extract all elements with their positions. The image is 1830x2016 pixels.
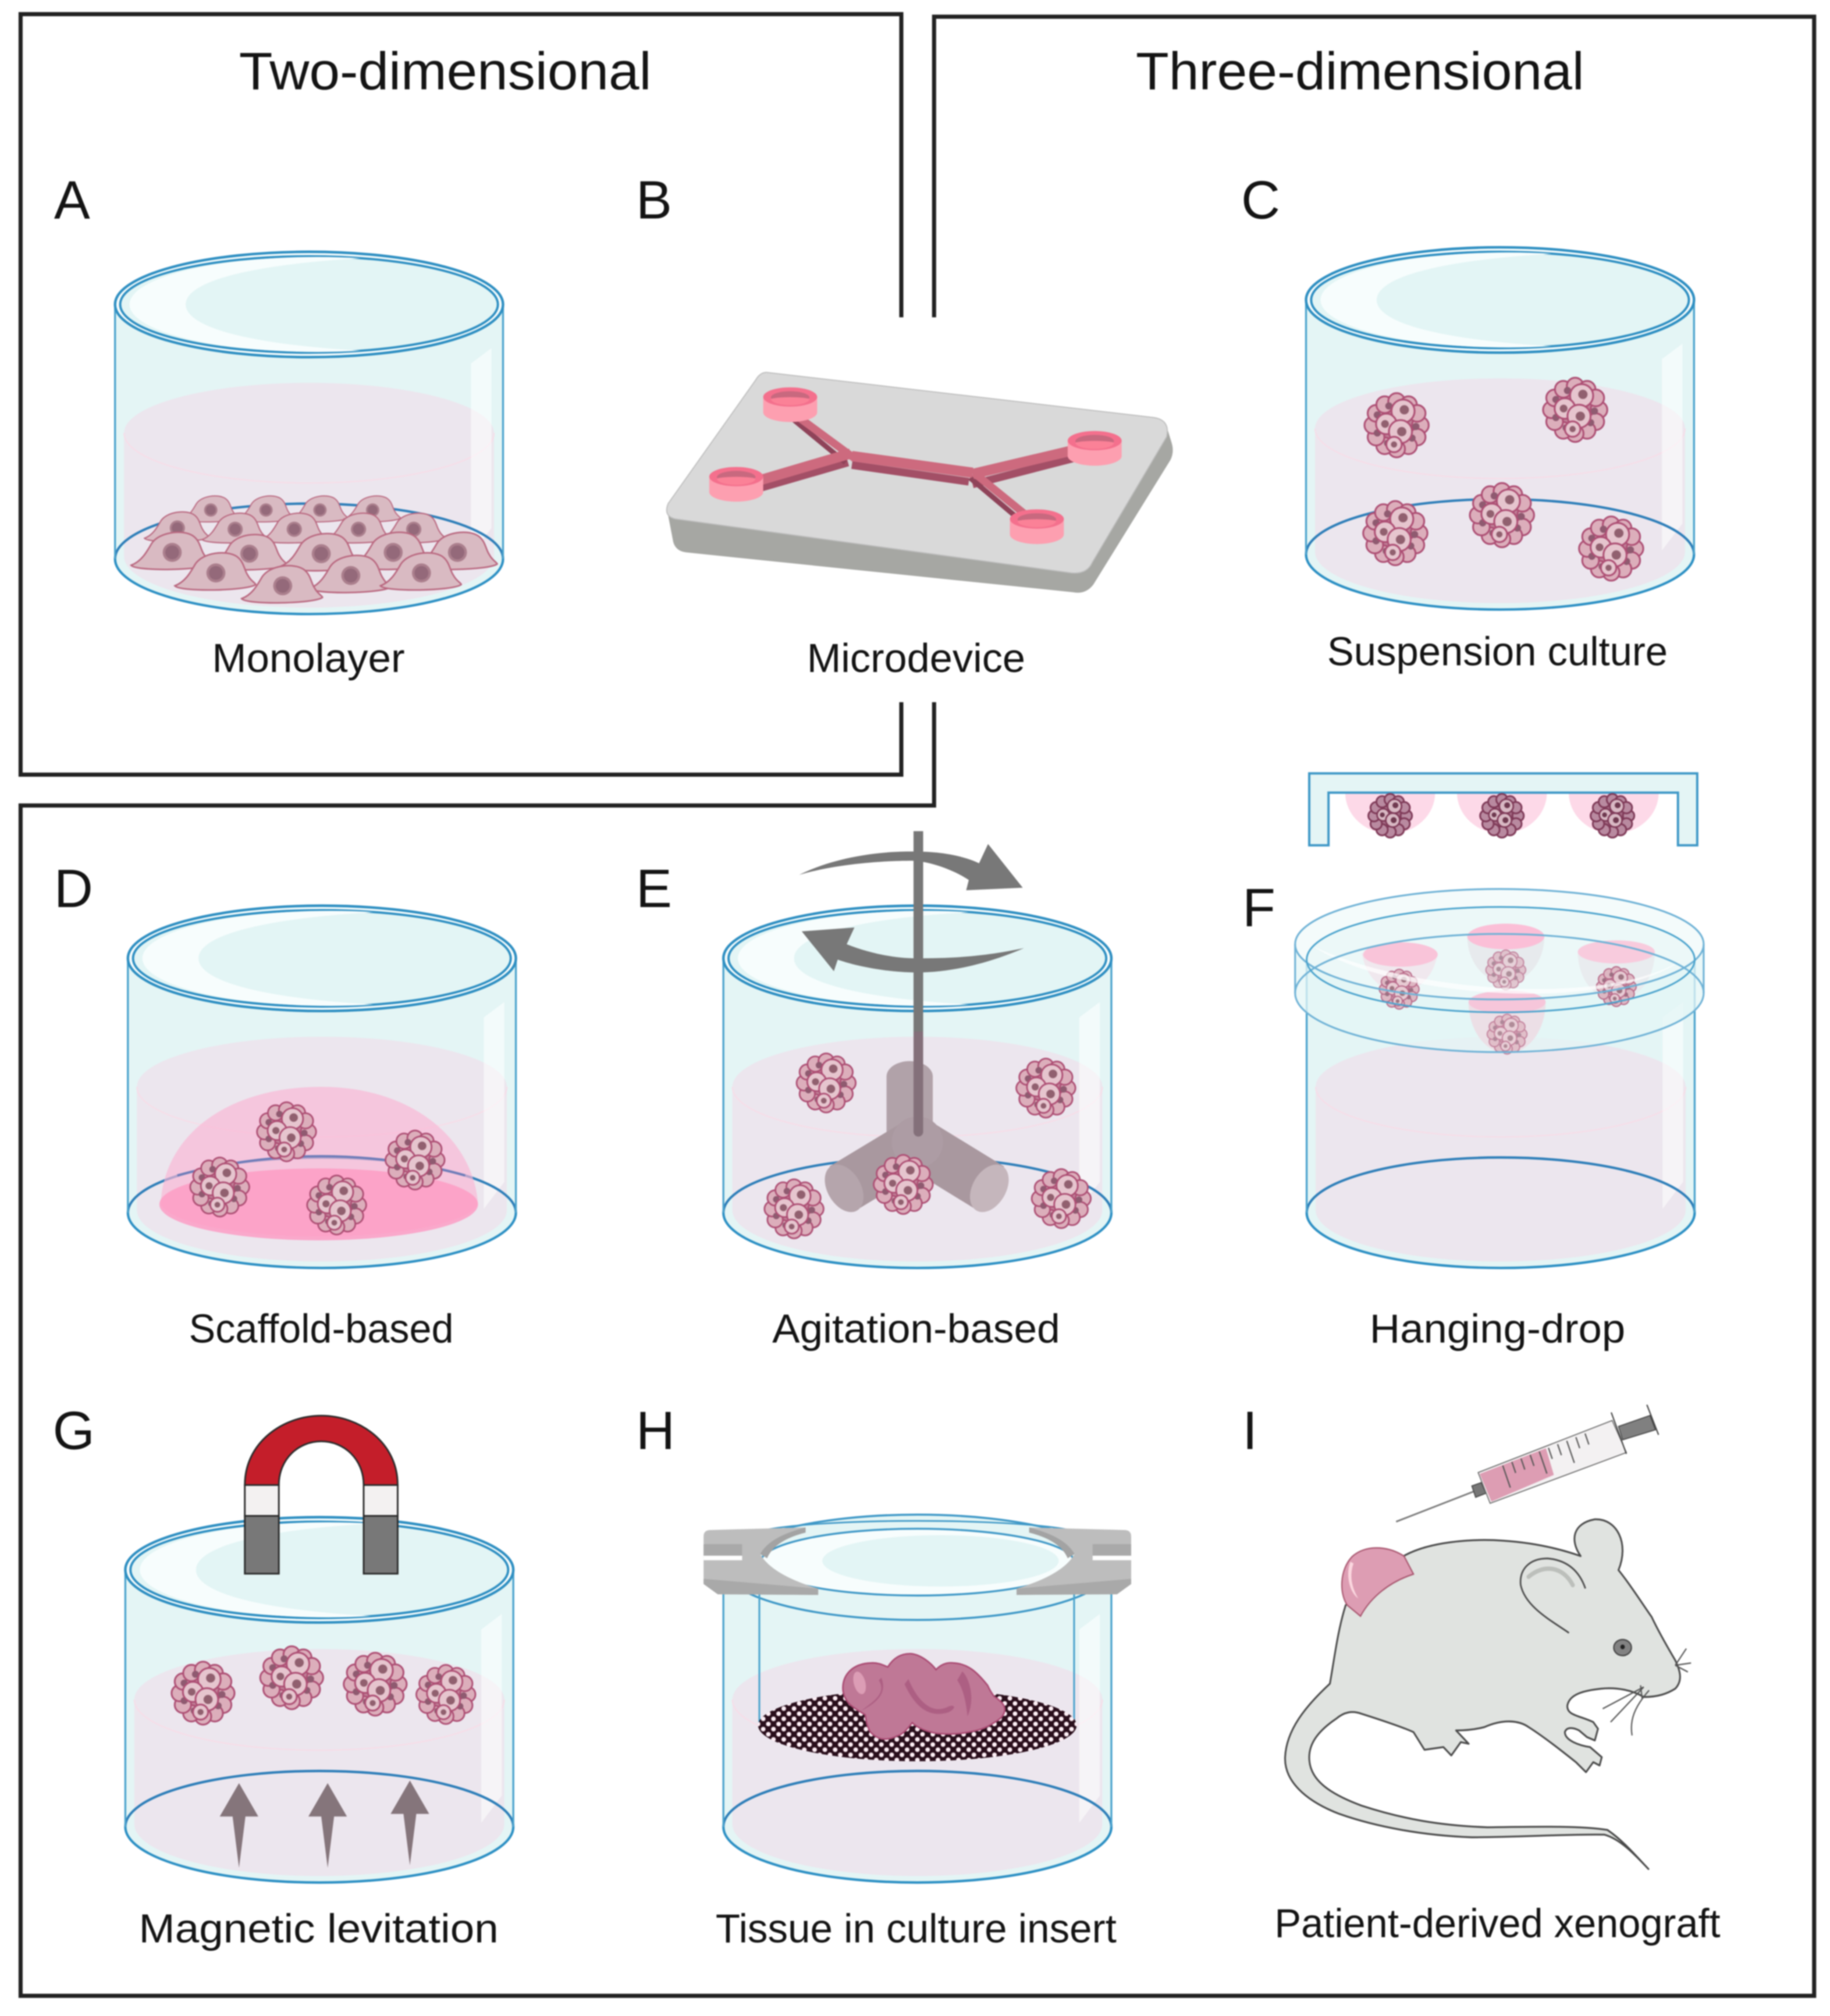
rotation arrow: clockwise front bbox=[802, 927, 1024, 972]
spheroids D bbox=[190, 1102, 445, 1235]
tumour bbox=[1342, 1548, 1413, 1616]
caption: patient-derived xenograft: Patient-derived xenograft bbox=[1274, 1901, 1721, 1946]
spheroids E bbox=[765, 1054, 1091, 1239]
panel I: patient-derived xenograft bbox=[1242, 1400, 1721, 1946]
dish D rim bbox=[128, 906, 516, 1011]
caption: tissue in culture insert: Tissue in culture insert bbox=[716, 1905, 1117, 1951]
caption: microdevice: Microdevice bbox=[807, 635, 1025, 681]
syringe bbox=[1396, 1405, 1658, 1521]
panel B: microdevice bbox=[636, 169, 1173, 681]
heading: two-dimensional: Two-dimensional bbox=[239, 42, 652, 101]
letter E: E bbox=[636, 858, 672, 919]
horseshoe magnet bbox=[245, 1416, 397, 1574]
heading: three-dimensional: Three-dimensional bbox=[1136, 42, 1584, 101]
dish F bbox=[1307, 958, 1694, 1268]
dish A bbox=[115, 304, 503, 614]
letter B: B bbox=[636, 169, 672, 230]
panel E: agitation-based bbox=[636, 831, 1111, 1351]
mouse and syringe bbox=[1285, 1405, 1691, 1869]
letter G: G bbox=[53, 1400, 95, 1461]
inverted lid with drops bbox=[1309, 773, 1697, 845]
caption: hanging-drop: Hanging-drop bbox=[1370, 1306, 1625, 1351]
insert hanger left bbox=[703, 1527, 818, 1595]
lens of insert bbox=[761, 1529, 1074, 1595]
letter C: C bbox=[1241, 169, 1280, 230]
rotation arrow: clockwise back bbox=[799, 844, 1023, 890]
spheroids in drops bbox=[1379, 950, 1636, 1054]
panel F: hanging-drop bbox=[1242, 773, 1704, 1351]
closed dish with lid bbox=[1295, 889, 1704, 1054]
frame: two-dimensional bbox=[20, 14, 901, 774]
wells bbox=[709, 387, 1122, 544]
upward arrows bbox=[220, 1780, 429, 1868]
caption: monolayer: Monolayer bbox=[212, 635, 405, 681]
microchannels bbox=[737, 411, 1092, 527]
panel A: monolayer bbox=[54, 169, 503, 681]
spheroids C bbox=[1363, 378, 1643, 581]
dish A rim bbox=[115, 252, 503, 357]
hanging drops bbox=[1362, 924, 1655, 1054]
caption: magnetic levitation: Magnetic levitation bbox=[139, 1905, 499, 1951]
whiskers bbox=[1602, 1649, 1691, 1736]
mouse body bbox=[1285, 1519, 1680, 1869]
caption: agitation-based: Agitation-based bbox=[772, 1306, 1060, 1351]
caption: suspension culture: Suspension culture bbox=[1327, 629, 1668, 674]
dish C rim bbox=[1306, 247, 1694, 353]
spheroids G bbox=[172, 1647, 475, 1725]
letter H: H bbox=[636, 1400, 675, 1461]
panel G: magnetic levitation bbox=[53, 1400, 513, 1951]
dish E rim bbox=[723, 906, 1111, 1011]
monolayer cells bbox=[131, 496, 498, 603]
dish D bbox=[128, 958, 516, 1268]
panel D: scaffold-based bbox=[54, 858, 516, 1351]
tissue sample bbox=[843, 1654, 1005, 1739]
letter I: I bbox=[1242, 1400, 1257, 1461]
dish H rim bbox=[723, 1514, 1111, 1620]
impeller bbox=[817, 1061, 1017, 1219]
letter A: A bbox=[54, 169, 90, 230]
dish G bbox=[125, 1570, 513, 1883]
mouse ear bbox=[1520, 1559, 1586, 1633]
insert hanger right bbox=[1017, 1527, 1131, 1595]
caption: scaffold-based: Scaffold-based bbox=[189, 1306, 454, 1351]
panel H: tissue in culture insert bbox=[636, 1400, 1131, 1951]
scaffold dome bbox=[159, 1087, 478, 1240]
letter F: F bbox=[1242, 877, 1275, 938]
insert walls bbox=[759, 1594, 1074, 1724]
mouse eye bbox=[1614, 1640, 1632, 1656]
dish C bbox=[1306, 300, 1694, 610]
stirrer shaft bbox=[914, 831, 923, 1137]
dish G rim bbox=[125, 1517, 513, 1623]
dish E bbox=[723, 958, 1111, 1268]
dish H bbox=[723, 1570, 1111, 1883]
insert mesh bbox=[758, 1690, 1076, 1761]
microdevice chip bbox=[667, 372, 1173, 593]
letter D: D bbox=[54, 858, 93, 919]
panel C: suspension culture bbox=[1241, 169, 1694, 674]
